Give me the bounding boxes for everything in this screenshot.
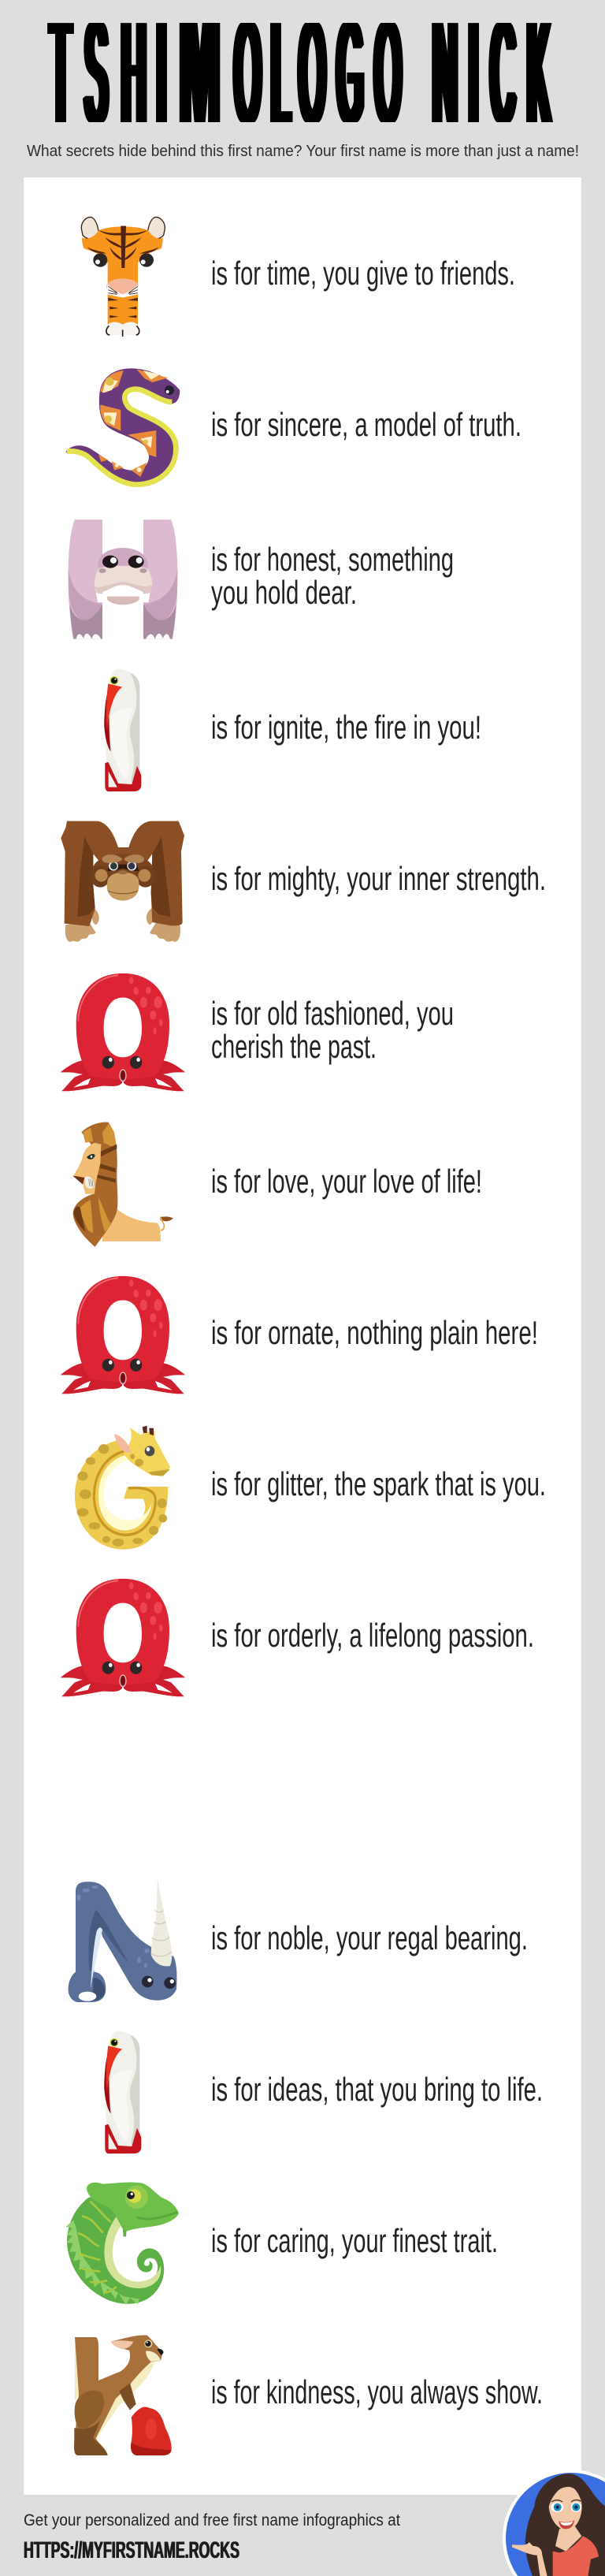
text: H lines: you hold dear. — [211, 574, 357, 611]
text: O lines: is for old fashioned, you — [211, 995, 454, 1032]
icon: octopus letter O — [61, 1276, 185, 1394]
icon: octopus letter O — [61, 973, 185, 1092]
row G: giraffe — [75, 1426, 546, 1550]
footer url: HTTPS://MYFIRSTNAME.ROCKS — [24, 2537, 239, 2563]
icon: snake letter S — [65, 368, 180, 487]
row S: snake — [65, 368, 521, 487]
icon: giraffe letter G — [75, 1426, 170, 1550]
icon: woman avatar badge — [496, 2467, 605, 2576]
icon: stork letter I — [104, 669, 141, 791]
row I: stork — [104, 669, 481, 791]
icon: narwhal letter N — [69, 1878, 177, 2002]
icon: stork letter I — [104, 2031, 141, 2153]
icon: lion letter L — [73, 1122, 173, 1247]
row H: hippo — [69, 519, 454, 639]
row K: kangaroo — [74, 2336, 543, 2455]
text: O lines: cherish the past. — [211, 1028, 377, 1065]
row I: stork 2 — [104, 2031, 543, 2153]
icon: ape letter M — [61, 821, 184, 942]
text: I line: is for ignite, the fire in you! — [211, 709, 481, 746]
title — [47, 23, 553, 122]
text: L line: is for love, your love of life! — [211, 1163, 482, 1200]
row O: octopus 2 — [61, 1276, 538, 1394]
icon: kangaroo letter K — [74, 2336, 172, 2455]
icon: tiger letter T — [81, 218, 165, 337]
row N: narwhal — [69, 1878, 528, 2002]
subtitle: What secrets hide behind this first name? Your first name is more than just a name! — [27, 143, 579, 160]
footer call to action: Get your personalized and free first name infographics at — [24, 2511, 400, 2529]
row O: octopus 3 — [61, 1579, 534, 1697]
icon: hippo letter H — [69, 519, 177, 639]
text: H lines: is for honest, something — [211, 541, 454, 578]
row T: tiger — [81, 218, 515, 337]
row L: lion — [73, 1122, 482, 1247]
icon: chameleon letter G — [65, 2183, 179, 2305]
row G: chameleon — [65, 2183, 498, 2305]
row M: ape — [61, 821, 546, 942]
row O: octopus 1 — [61, 973, 454, 1092]
icon: octopus letter O — [61, 1579, 185, 1697]
